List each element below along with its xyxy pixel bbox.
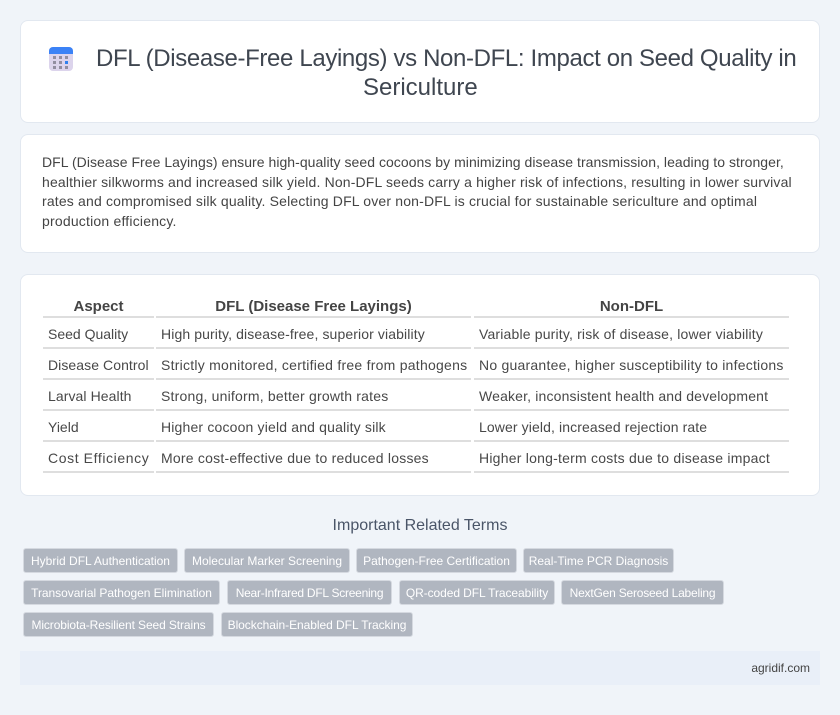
row: yield: Higher cocoon yield and quality silk <box>161 419 386 435</box>
chip: Hybrid DFL Authentication <box>31 554 170 568</box>
chip: QR-coded DFL Traceability <box>406 586 548 600</box>
chip: Real-Time PCR Diagnosis <box>529 554 668 568</box>
row: yield <box>48 419 707 435</box>
panel: header <box>20 20 820 123</box>
row: larval health: Strong, uniform, better growth rates <box>161 388 388 404</box>
row: larval health: Weaker, inconsistent health and development <box>479 388 768 404</box>
chip <box>221 612 413 637</box>
header row: Aspect <box>73 298 124 315</box>
row: seed quality: High purity, disease-free, superior viability <box>161 326 425 342</box>
footer bar <box>20 651 820 685</box>
chip <box>23 580 220 605</box>
row: disease control: Strictly monitored, certified free from pathogens <box>161 357 467 373</box>
chip: Blockchain-Enabled DFL Tracking <box>228 618 406 632</box>
title: Sericulture <box>363 74 478 101</box>
chip <box>523 548 674 573</box>
chip <box>184 548 350 573</box>
chip: Molecular Marker Screening <box>192 554 342 568</box>
chip <box>561 580 724 605</box>
summary text: DFL (Disease Free Layings) ensure high-quality seed cocoons by minimizing disease transmission, leading to stronger, <box>42 154 784 170</box>
summary text: production efficiency. <box>42 213 177 229</box>
row: seed quality: Seed Quality <box>48 326 128 342</box>
row: disease control <box>48 357 784 373</box>
row: disease control: No guarantee, higher susceptibility to infections <box>479 357 784 373</box>
chip: Microbiota-Resilient Seed Strains <box>31 618 206 632</box>
row: cost efficiency: Cost Efficiency <box>48 450 149 466</box>
heading: related terms: Important Related Terms <box>333 517 507 534</box>
chip <box>356 548 517 573</box>
header row: Non-DFL <box>600 298 663 315</box>
row: yield: Lower yield, increased rejection rate <box>479 419 707 435</box>
icon: calendar <box>49 47 73 71</box>
summary text: rates and compromised silk quality. Selecting DFL over non-DFL is crucial for sustainable sericulture and optimal <box>42 193 757 209</box>
row: cost efficiency: More cost-effective due to reduced losses <box>161 450 429 466</box>
row: seed quality <box>48 326 763 342</box>
summary text: healthier silkworms and increased silk yield. Non-DFL seeds carry a higher risk of infections, resulting in lower survival <box>42 174 792 190</box>
row: larval health <box>48 388 768 404</box>
panel: comparison table <box>20 274 820 496</box>
row: cost efficiency <box>48 450 770 466</box>
chip <box>227 580 392 605</box>
row: yield: Yield <box>48 419 79 435</box>
summary text <box>42 154 792 229</box>
chip <box>23 548 178 573</box>
related terms chips <box>23 548 724 637</box>
chip: Transovarial Pathogen Elimination <box>31 586 212 600</box>
title <box>96 45 796 101</box>
row: seed quality: Variable purity, risk of disease, lower viability <box>479 326 763 342</box>
row: cost efficiency: Higher long-term costs due to disease impact <box>479 450 770 466</box>
chip <box>399 580 555 605</box>
header row: DFL (Disease Free Layings) <box>215 298 412 315</box>
chip: NextGen Seroseed Labeling <box>570 586 715 600</box>
comparison table <box>43 298 789 473</box>
chip: Pathogen-Free Certification <box>363 554 510 568</box>
row: larval health: Larval Health <box>48 388 132 404</box>
row: disease control: Disease Control <box>48 357 149 373</box>
panel: summary <box>20 134 820 253</box>
chip <box>23 612 214 637</box>
chip: Near-Infrared DFL Screening <box>236 586 383 600</box>
title: DFL (Disease-Free Layings) vs Non-DFL: Impact on Seed Quality in <box>96 45 796 72</box>
header row <box>73 298 663 315</box>
footer source: agridif.com <box>751 661 810 675</box>
